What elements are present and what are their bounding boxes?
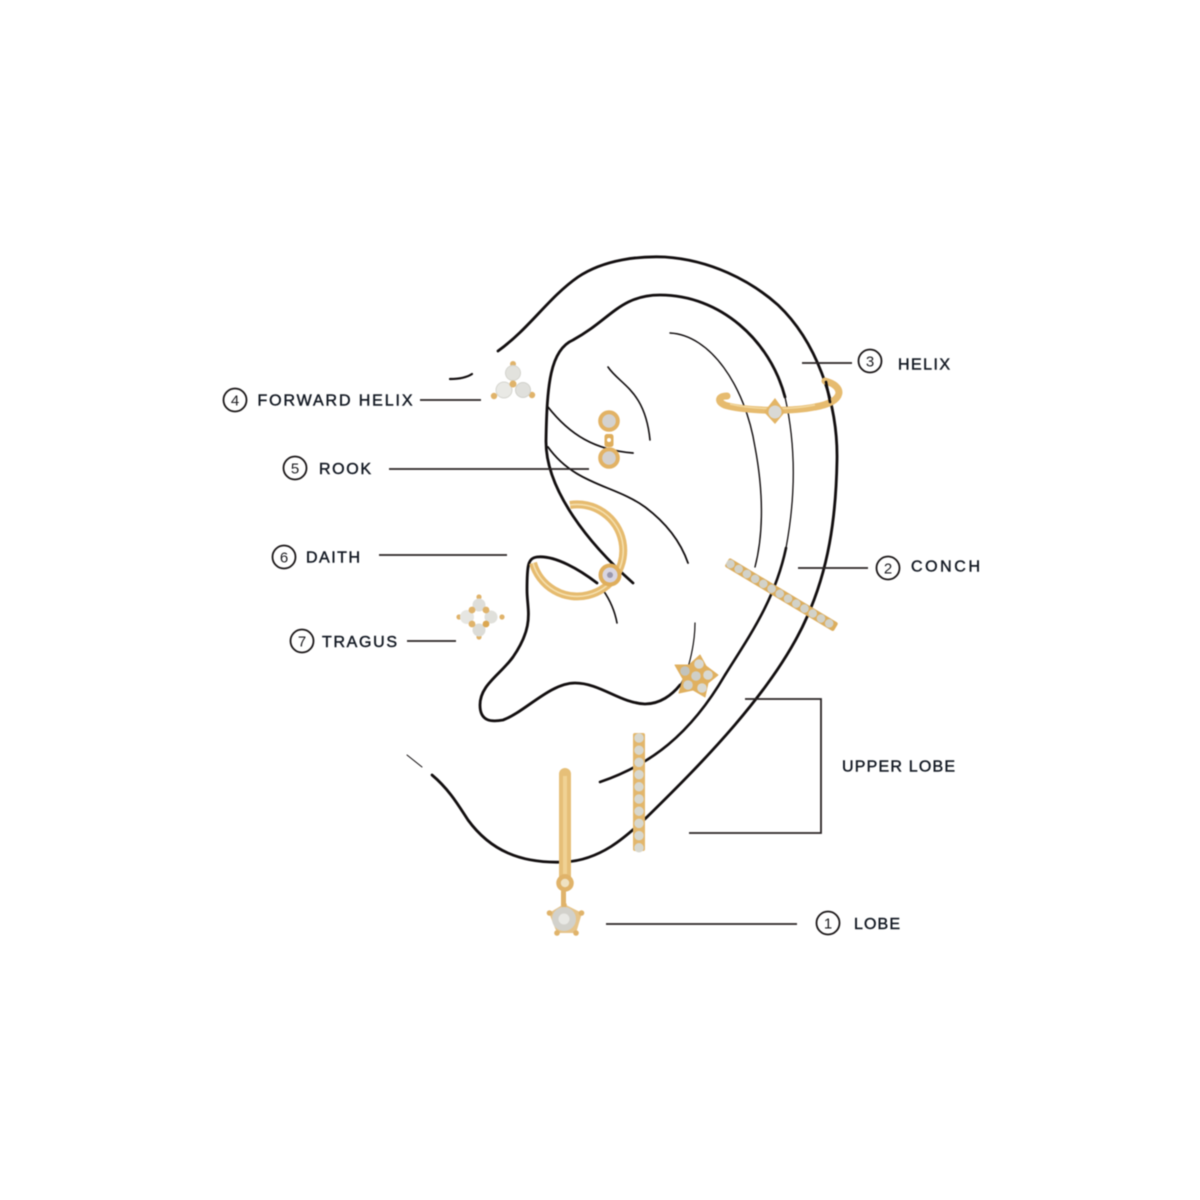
label: helix: HELIX (898, 356, 950, 374)
label: lobe: LOBE (854, 916, 900, 933)
label: tragus (290, 630, 456, 652)
jewelry: forward helix trio stud (491, 361, 535, 399)
jewelry: helix hoop (720, 381, 839, 424)
label: upper lobe with bracket (689, 699, 955, 833)
label: daith: 6 (280, 550, 288, 566)
label: rook: 5 (291, 460, 299, 478)
label: rook: ROOK (319, 461, 371, 478)
jewelry: tragus four-point stud (456, 594, 505, 640)
antihelix thin curve (670, 333, 761, 567)
jewelry: conch bar (724, 558, 838, 632)
label: conch: 2 (884, 560, 892, 578)
label: forward helix: 4 (231, 392, 239, 410)
label: conch: CONCH (911, 558, 980, 576)
label: forward helix (224, 388, 481, 412)
inner helix lower curve (600, 548, 786, 782)
crus line one (548, 407, 633, 453)
label: rook (284, 456, 589, 480)
temple short stroke (450, 374, 472, 379)
jewelry: star stud (675, 655, 718, 697)
antitragus short curve (603, 590, 617, 623)
jewelry: rook double bezel (600, 412, 618, 467)
label: helix (802, 350, 950, 374)
tragus and concha curve (480, 557, 680, 721)
earlobe end stroke (407, 755, 422, 767)
label: daith (272, 546, 507, 568)
jewelry: daith ring (533, 504, 623, 596)
label: lobe (606, 912, 900, 934)
leader lines and labels (224, 350, 980, 934)
label: forward helix: FORWARD HELIX (258, 392, 413, 410)
label: conch (798, 556, 980, 580)
ear outline drawing (407, 257, 837, 862)
jewelry: upper lobe bar (633, 733, 645, 851)
label: helix: 3 (866, 354, 874, 370)
label: upper lobe with bracket: UPPER LOBE (842, 758, 955, 776)
outer helix curve (432, 257, 837, 862)
upper crus short curve (608, 367, 650, 440)
jewelry: lobe hoop with drop (547, 774, 584, 936)
label: tragus: TRAGUS (322, 634, 397, 651)
label: daith: DAITH (306, 550, 360, 566)
label: tragus: 7 (298, 634, 306, 650)
inner helix upper curve (546, 295, 785, 583)
concha thin end curve (680, 623, 695, 685)
crus line two (548, 447, 688, 563)
label: lobe: 1 (824, 916, 832, 932)
inner helix right thin curve (785, 397, 793, 548)
